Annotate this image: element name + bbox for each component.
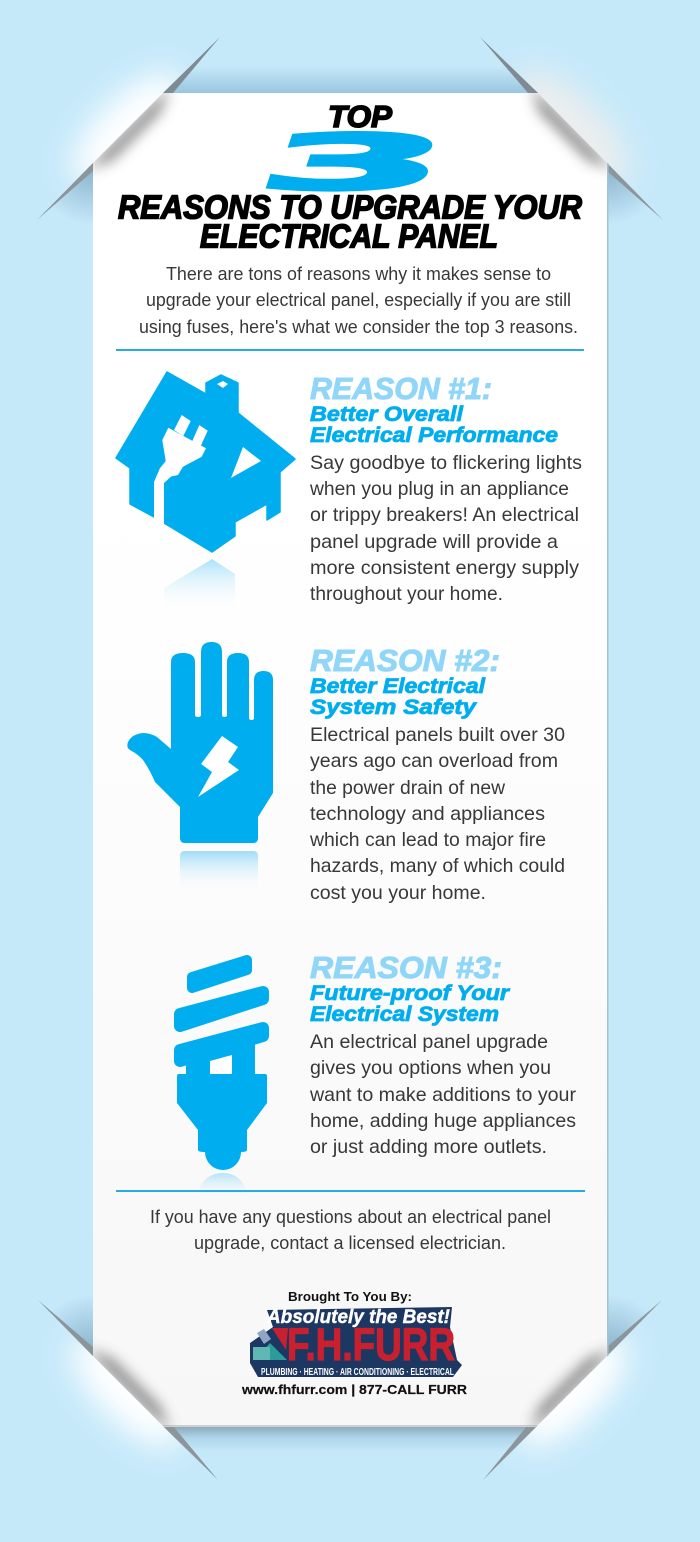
title: TOP	[328, 99, 392, 134]
icon reflection: house	[164, 559, 235, 612]
logo: F.H. Furr: PLUMBING · HEATING · AIR CONDITIONING · ELECTRICAL	[261, 1367, 454, 1378]
icon reflection: bulb	[198, 1173, 247, 1210]
reason 2: years ago can overload from	[310, 750, 558, 772]
website and phone: www.fhfurr.com | 877-CALL FURR	[241, 1382, 468, 1397]
reason 3: Future-proof Your	[310, 982, 511, 1005]
closing text	[150, 1207, 551, 1253]
reason 1: or trippy breakers! An electrical	[310, 504, 579, 526]
icon: house with plug	[116, 372, 295, 552]
reason 1: when you plug in an appliance	[309, 478, 569, 500]
closing text: upgrade, contact a licensed electrician.	[194, 1233, 506, 1253]
reason 3	[309, 950, 577, 1158]
reason 2: technology and appliances	[310, 803, 545, 825]
reason 2: REASON #2:	[310, 643, 500, 678]
reason 3: gives you options when you	[310, 1057, 551, 1079]
icon reflection: hand	[180, 851, 258, 892]
big number 3: 3	[247, 119, 462, 207]
reason 1: REASON #1:	[310, 371, 492, 406]
reason 2: cost you your home.	[310, 882, 486, 904]
title	[118, 99, 582, 254]
reason 2	[309, 643, 565, 904]
reason 3: or just adding more outlets.	[310, 1136, 547, 1158]
intro text	[139, 264, 578, 337]
intro text: There are tons of reasons why it makes sense to	[166, 264, 551, 284]
intro text: upgrade your electrical panel, especially if you are still	[146, 290, 571, 310]
reason 3: Electrical System	[310, 1003, 499, 1026]
reason 1: Say goodbye to flickering lights	[310, 452, 582, 474]
reason 1: more consistent energy supply	[310, 557, 579, 579]
reason 2: the power drain of new	[310, 777, 506, 799]
intro text: using fuses, here's what we consider the top 3 reasons.	[139, 317, 578, 337]
corner glows	[56, 54, 646, 1463]
reason 2: Better Electrical	[310, 675, 486, 698]
reason 1	[309, 371, 582, 605]
closing text: If you have any questions about an electrical panel	[150, 1207, 551, 1227]
logo: F.H. Furr: Absolutely the Best!	[266, 1307, 450, 1328]
reason 1: Better Overall	[310, 403, 464, 426]
title: REASONS TO UPGRADE YOUR	[118, 188, 582, 226]
icon: light bulb	[177, 960, 267, 1170]
reason 2: Electrical panels built over 30	[310, 724, 565, 746]
logo: F.H. Furr	[250, 1307, 462, 1378]
reason 2: System Safety	[310, 696, 478, 719]
title: ELECTRICAL PANEL	[200, 218, 498, 254]
reason 1: Electrical Performance	[310, 424, 558, 447]
reason 1: panel upgrade will provide a	[310, 531, 558, 553]
reason 2: hazards, many of which could	[310, 855, 565, 877]
logo: F.H. Furr: F.H.FURR	[287, 1319, 455, 1370]
icon: hand with lightning bolt	[127, 642, 273, 843]
reason 3: REASON #3:	[310, 950, 502, 985]
reason 3: home, adding huge appliances	[310, 1110, 576, 1132]
reason 3: want to make additions to your	[309, 1084, 577, 1106]
white paper panel	[86, 86, 614, 1433]
reason 3: An electrical panel upgrade	[310, 1031, 548, 1053]
reason 1: throughout your home.	[310, 583, 503, 605]
brought to you by: Brought To You By:	[288, 1290, 412, 1304]
reason 2: which can lead to major fire	[309, 829, 546, 851]
